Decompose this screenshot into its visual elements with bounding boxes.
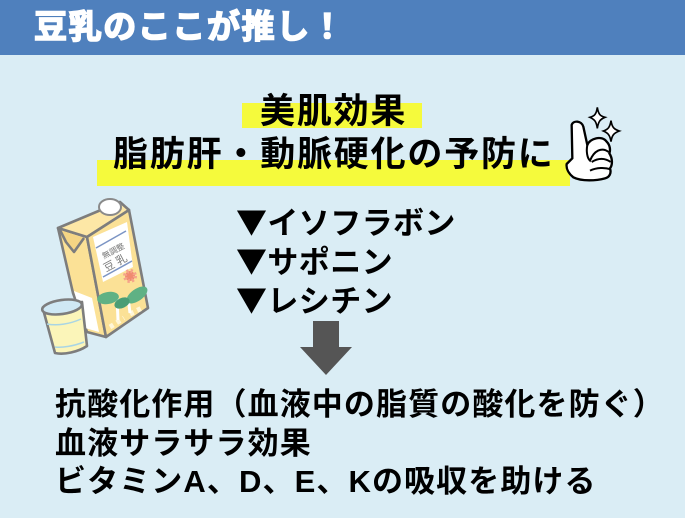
title: 豆乳のここが推し！ <box>34 8 345 45</box>
highlight: line 1 <box>242 103 422 128</box>
white panel on side <box>74 291 99 332</box>
label rule top <box>96 231 126 248</box>
item: ▼イソフラボン <box>236 198 456 243</box>
glass <box>41 297 87 354</box>
beans <box>110 307 144 327</box>
item: ▼サポニン <box>236 237 393 282</box>
heading: benefits line 1: 美肌効果 <box>260 92 407 131</box>
carton label <box>93 222 133 282</box>
text block: effects <box>55 387 665 499</box>
highlight: line 2 <box>97 160 570 186</box>
effect: 抗酸化作用（血液中の脂質の酸化を防ぐ） <box>55 387 665 422</box>
label text: 無調整 <box>100 241 126 261</box>
list: active ingredients <box>236 198 456 321</box>
header band <box>0 0 685 55</box>
effect: 血液サラサラ効果 <box>55 426 312 461</box>
sun <box>125 271 135 281</box>
item: ▼レシチン <box>236 276 393 321</box>
arrow: down <box>300 321 352 375</box>
icon: thumbs up with sparkles <box>565 107 622 182</box>
label text 2: 豆 乳 <box>101 251 130 275</box>
icon: soy milk carton and glass <box>40 198 150 355</box>
sprout <box>96 283 150 320</box>
effect: ビタミンA、D、E、Kの吸収を助ける <box>55 464 597 499</box>
carton cap <box>99 199 121 215</box>
label rule bottom <box>103 261 132 277</box>
carton body <box>58 202 148 337</box>
heading: benefits line 2: 脂肪肝・動脈硬化の予防に <box>113 135 555 174</box>
